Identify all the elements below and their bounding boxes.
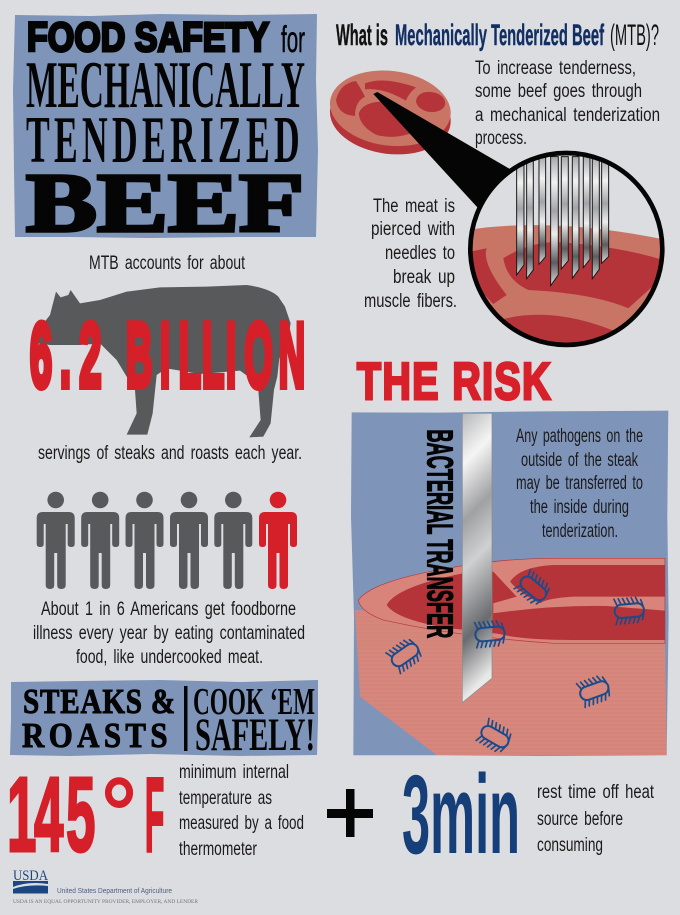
steak (326, 64, 455, 161)
bacterium 4 (386, 636, 424, 674)
wedge (373, 92, 512, 208)
title line: tenderized: TENDERIZED (26, 103, 304, 177)
title line: food safety: FOOD SAFETY (27, 14, 269, 60)
bacterium 6 (476, 718, 514, 755)
text: equal opportunity: USDA IS AN EQUAL OPPORTUNITY PROVIDER, EMPLOYER, AND LENDER (13, 899, 198, 905)
big number: 6.2 billion (30, 304, 305, 406)
person 5 (214, 492, 252, 589)
logo: USDA (13, 868, 48, 894)
big number: 6.2 billion: 6.2 (30, 304, 101, 406)
title line: beef: BEEF (26, 157, 304, 250)
steak side (355, 610, 667, 755)
title word: for: for (281, 19, 305, 60)
text: 3min (402, 752, 520, 877)
text: meat is pierced: break up (393, 267, 455, 288)
bacterium 3 (474, 620, 506, 648)
panel: title (13, 14, 318, 250)
text: to increase tenderness: To increase tenderness, (475, 58, 636, 79)
text: minimum internal temperature: minimum internal (179, 762, 289, 783)
banner text: steaks and roasts (22, 682, 176, 755)
icon: plus (327, 789, 373, 837)
text: foodborne illness (33, 599, 305, 668)
text: foodborne illness: About 1 in 6 Americans get foodborne (41, 599, 296, 620)
text: meat is pierced: The meat is (373, 196, 455, 217)
needles (517, 157, 609, 286)
needle blade (462, 413, 492, 703)
text: minimum internal temperature: measured by a food (179, 813, 304, 834)
lens (472, 156, 660, 343)
text: to increase tenderness (475, 58, 660, 149)
text: meat is pierced: pierced with (371, 219, 455, 240)
illustration: needles magnifier (326, 64, 667, 350)
big number: 145 degrees F (7, 755, 164, 874)
text: MTB accounts: MTB accounts for about (89, 253, 246, 274)
text: servings: servings of steaks and roasts each year. (38, 443, 302, 464)
person 6 highlighted (259, 492, 297, 589)
person 4 (170, 492, 208, 589)
text: to increase tenderness: process. (475, 128, 527, 149)
text: pathogens: the inside during (530, 497, 629, 518)
text: minimum internal temperature: thermometer (179, 839, 257, 860)
panel: the risk (351, 411, 669, 756)
text: rest time: source before (537, 809, 623, 830)
text: minimum internal temperature (179, 762, 304, 860)
text: department name: United States Department of Agriculture (57, 888, 172, 895)
bacterium 2 (614, 597, 645, 625)
banner text: cook em safely: COOK ‘EM (193, 681, 315, 723)
bacterium 5 (576, 674, 612, 708)
heading: what is MTB: What is (336, 19, 388, 52)
bacterium 1 (514, 569, 553, 607)
text: bacterial transfer: BACTERIAL TRANSFER (419, 429, 460, 638)
text: rest time: consuming (537, 835, 603, 856)
text: minimum internal temperature: temperature as (179, 788, 272, 809)
person 2 (81, 492, 119, 589)
panel: cook safely banner (10, 680, 318, 761)
text: meat is pierced: muscle fibers. (364, 291, 457, 312)
banner text: steaks and roasts: ROASTS (22, 716, 172, 755)
big number: 6.2 billion: BILLION (126, 304, 305, 406)
text: rest time (537, 782, 655, 856)
icon: cow silhouette (37, 285, 291, 437)
bacteria (386, 569, 645, 755)
text: meat is pierced (364, 196, 457, 312)
panel: title: MECHANICALLY (26, 48, 305, 122)
text: meat is pierced: needles to (385, 243, 455, 264)
heading: the risk: THE RISK (357, 353, 552, 411)
big number: 145 degrees F: ° (101, 757, 137, 869)
text: pathogens: tenderization. (542, 521, 618, 542)
text: foodborne illness: food, like undercooked meat. (76, 647, 263, 668)
pictogram: 1 in 6 people (37, 492, 297, 589)
banner text: cook em safely (193, 681, 315, 761)
person 3 (126, 492, 164, 589)
text: pathogens (516, 426, 643, 542)
steak top (358, 558, 665, 643)
big number: 145 degrees F: 145 (7, 755, 95, 874)
banner text: steaks and roasts: STEAKS & (23, 682, 176, 721)
person 1 (37, 492, 75, 589)
big number: 145 degrees F: F (145, 755, 164, 874)
text: foodborne illness: illness every year by eating contaminated (33, 623, 305, 644)
banner text: cook em safely: SAFELY! (195, 709, 315, 761)
logo: USDA: USDA (13, 868, 48, 884)
